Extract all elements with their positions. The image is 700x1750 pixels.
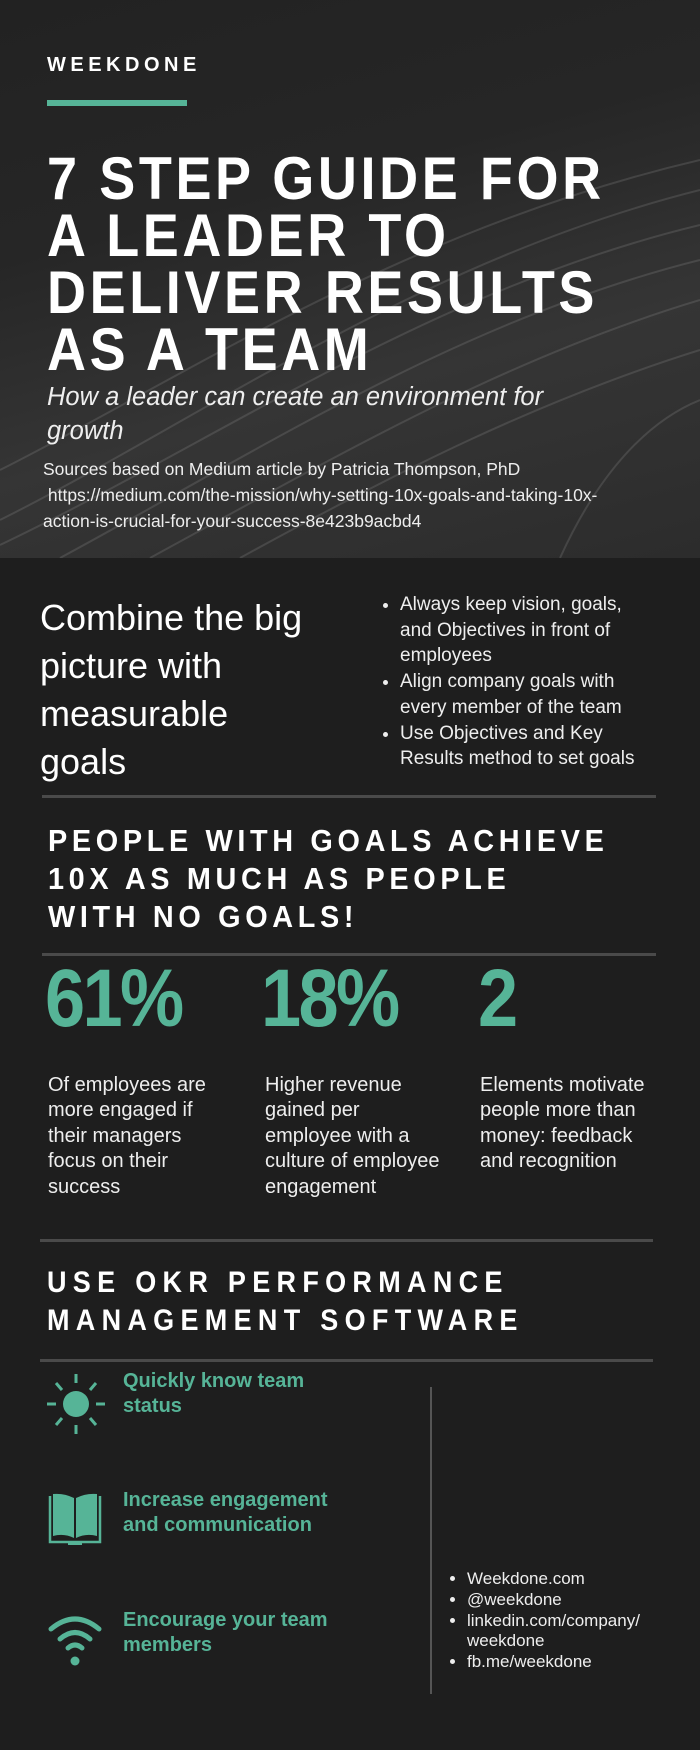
icon: book [48, 1494, 102, 1545]
stat: 18%: 18% [261, 953, 398, 1044]
heading: use OKR software: MANAGEMENT SOFTWARE [47, 1304, 524, 1337]
subtitle: How a leader can create an environment for growth [47, 383, 543, 445]
vertical divider [430, 1387, 432, 1694]
links list [450, 1569, 640, 1671]
stat: 61% [45, 953, 206, 1198]
links list: Weekdone.com [467, 1569, 585, 1588]
title: A LEADER TO [47, 202, 450, 269]
title: DELIVER RESULTS [47, 259, 598, 326]
stat: 61%: Of employees are more engaged if their managers focus on their success [48, 1074, 206, 1198]
links list: fb.me/weekdone [467, 1652, 592, 1671]
bullet list: vision: Always keep vision, goals, and Objectives in front of employees [400, 594, 622, 666]
heading: use OKR software: USE OKR PERFORMANCE [47, 1266, 509, 1299]
heading: people with goals: PEOPLE WITH GOALS ACHIEVE [48, 823, 608, 858]
title [47, 145, 605, 383]
heading: people with goals: WITH NO GOALS! [48, 899, 358, 934]
stat: 2 [478, 953, 645, 1172]
header background photo [0, 0, 700, 558]
heading: people with goals [48, 823, 608, 934]
sources text [43, 459, 597, 531]
stat: 2: 2 [478, 953, 515, 1044]
sources text: https://medium.com/the-mission/why-setting-10x-goals-and-taking-10x-action-is-crucial-for-your-success-8e423b9acbd4 [43, 485, 597, 531]
bullet list: vision: Use Objectives and Key Results method to set goals [400, 723, 634, 769]
title: 7 STEP GUIDE FOR [47, 145, 605, 212]
stat: 2: Elements motivate people more than money: feedback and recognition [480, 1074, 645, 1172]
icon: sun [47, 1374, 105, 1434]
title: AS A TEAM [47, 316, 372, 383]
bullet list: vision [383, 594, 634, 769]
brand: WEEKDONE: WEEKDONE [47, 54, 201, 76]
stat: 18%: Higher revenue gained per employee with a culture of employee engagement [265, 1074, 440, 1198]
stat: 61%: 61% [45, 953, 182, 1044]
feature: engagement: Increase engagement and communication [123, 1489, 328, 1536]
heading: combine big picture: Combine the big picture with measurable goals [40, 597, 302, 782]
accent bar [47, 100, 187, 106]
links list: @weekdone [467, 1590, 562, 1609]
feature: encourage: Encourage your team members [123, 1609, 328, 1656]
heading: people with goals: 10X AS MUCH AS PEOPLE [48, 861, 510, 896]
stat: 18% [261, 953, 440, 1198]
feature: encourage [48, 1609, 328, 1666]
sources text: Sources based on Medium article by Patricia Thompson, PhD [43, 459, 520, 479]
feature: engagement [48, 1489, 328, 1545]
bullet list: vision: Align company goals with every member of the team [400, 671, 622, 718]
feature: team status [47, 1370, 304, 1434]
heading: use OKR software [47, 1266, 524, 1337]
feature: team status: Quickly know team status [123, 1370, 304, 1417]
links list: linkedin.com/company/ weekdone [467, 1611, 640, 1650]
icon: wifi [48, 1616, 102, 1666]
